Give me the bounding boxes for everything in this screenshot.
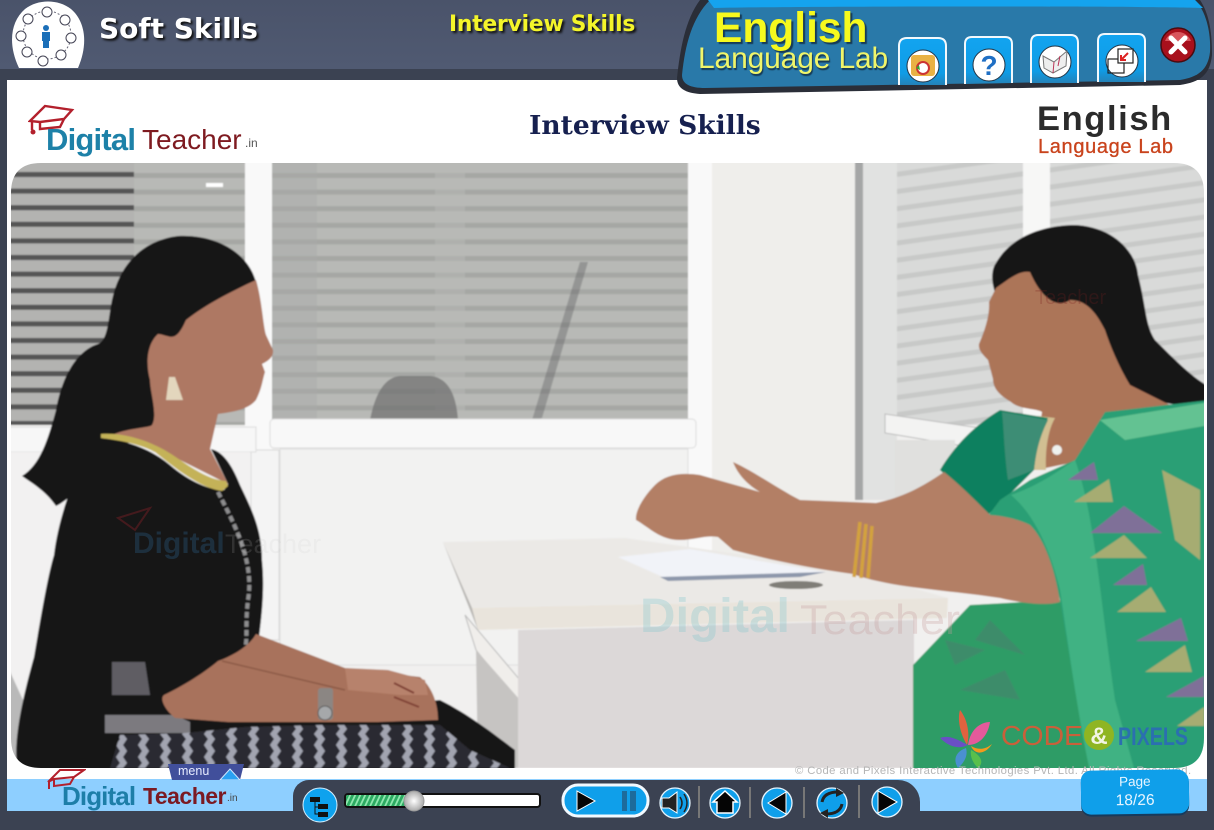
toolbar icons [898, 27, 1196, 85]
content logo: Digital Teacher [28, 104, 258, 157]
content logo: Digital Teacher: .in [245, 136, 258, 150]
content logo: Digital Teacher: Teacher [142, 124, 242, 155]
toolbar icons: ? [980, 50, 998, 81]
copyright line: © Code and Pixels Interactive Technologies Pvt. Ltd. All Rights Reserved. [795, 765, 1192, 777]
video still: interview scene: Teacher [800, 596, 960, 643]
menu tab: menu [178, 764, 209, 778]
page number: 18/26 [1116, 792, 1155, 809]
play and pause button [562, 784, 650, 818]
code and pixels logo: CODE [1001, 720, 1083, 751]
content logo: English Language Lab [1037, 100, 1174, 158]
footer logo: Digital Teacher: Digital [62, 781, 135, 811]
progress slider [344, 790, 541, 812]
header logo: soft skills circle [12, 2, 84, 68]
menu tab [168, 764, 244, 780]
content heading: Interview Skills: Interview Skills [529, 110, 761, 141]
footer logo: Digital Teacher: .in [227, 793, 238, 804]
frames and column [246, 163, 272, 449]
footer logo: Digital Teacher: Teacher [143, 783, 226, 809]
watermark logo: Teacher [1035, 287, 1106, 309]
content logo: English Language Lab: Language Lab [1038, 136, 1174, 158]
table [443, 538, 948, 608]
control icons [659, 785, 903, 819]
video still: interview scene: Digital [640, 590, 790, 643]
page label: Page [1119, 774, 1151, 789]
video still: interview scene [11, 163, 1204, 819]
watermark logo: Digital [133, 527, 225, 560]
person: candidate [16, 236, 515, 772]
toolbar subtitle: Language Lab: Language Lab [698, 42, 888, 75]
person: interviewer [636, 225, 1210, 772]
watermark logo: Teacher [225, 529, 321, 559]
header bar [0, 0, 1214, 69]
footer light blue band [7, 779, 1207, 811]
toolbar title: English: English [714, 5, 867, 52]
wall [11, 415, 1066, 768]
content logo: Digital Teacher: Digital [46, 122, 135, 157]
footer logo: Digital Teacher [47, 769, 238, 811]
header title: Soft Skills: Soft Skills [99, 12, 258, 45]
tree menu button [302, 788, 338, 822]
code and pixels logo [940, 710, 1188, 768]
page counter [1081, 769, 1189, 815]
header topic: Interview Skills: Interview Skills [449, 12, 635, 37]
English Language Lab toolbar [677, 0, 1212, 94]
blinds windows [133, 163, 246, 426]
watermark logo [118, 287, 1106, 560]
code and pixels logo: & [1090, 723, 1108, 750]
content logo: English Language Lab: English [1037, 100, 1173, 138]
player control bar [293, 780, 920, 830]
